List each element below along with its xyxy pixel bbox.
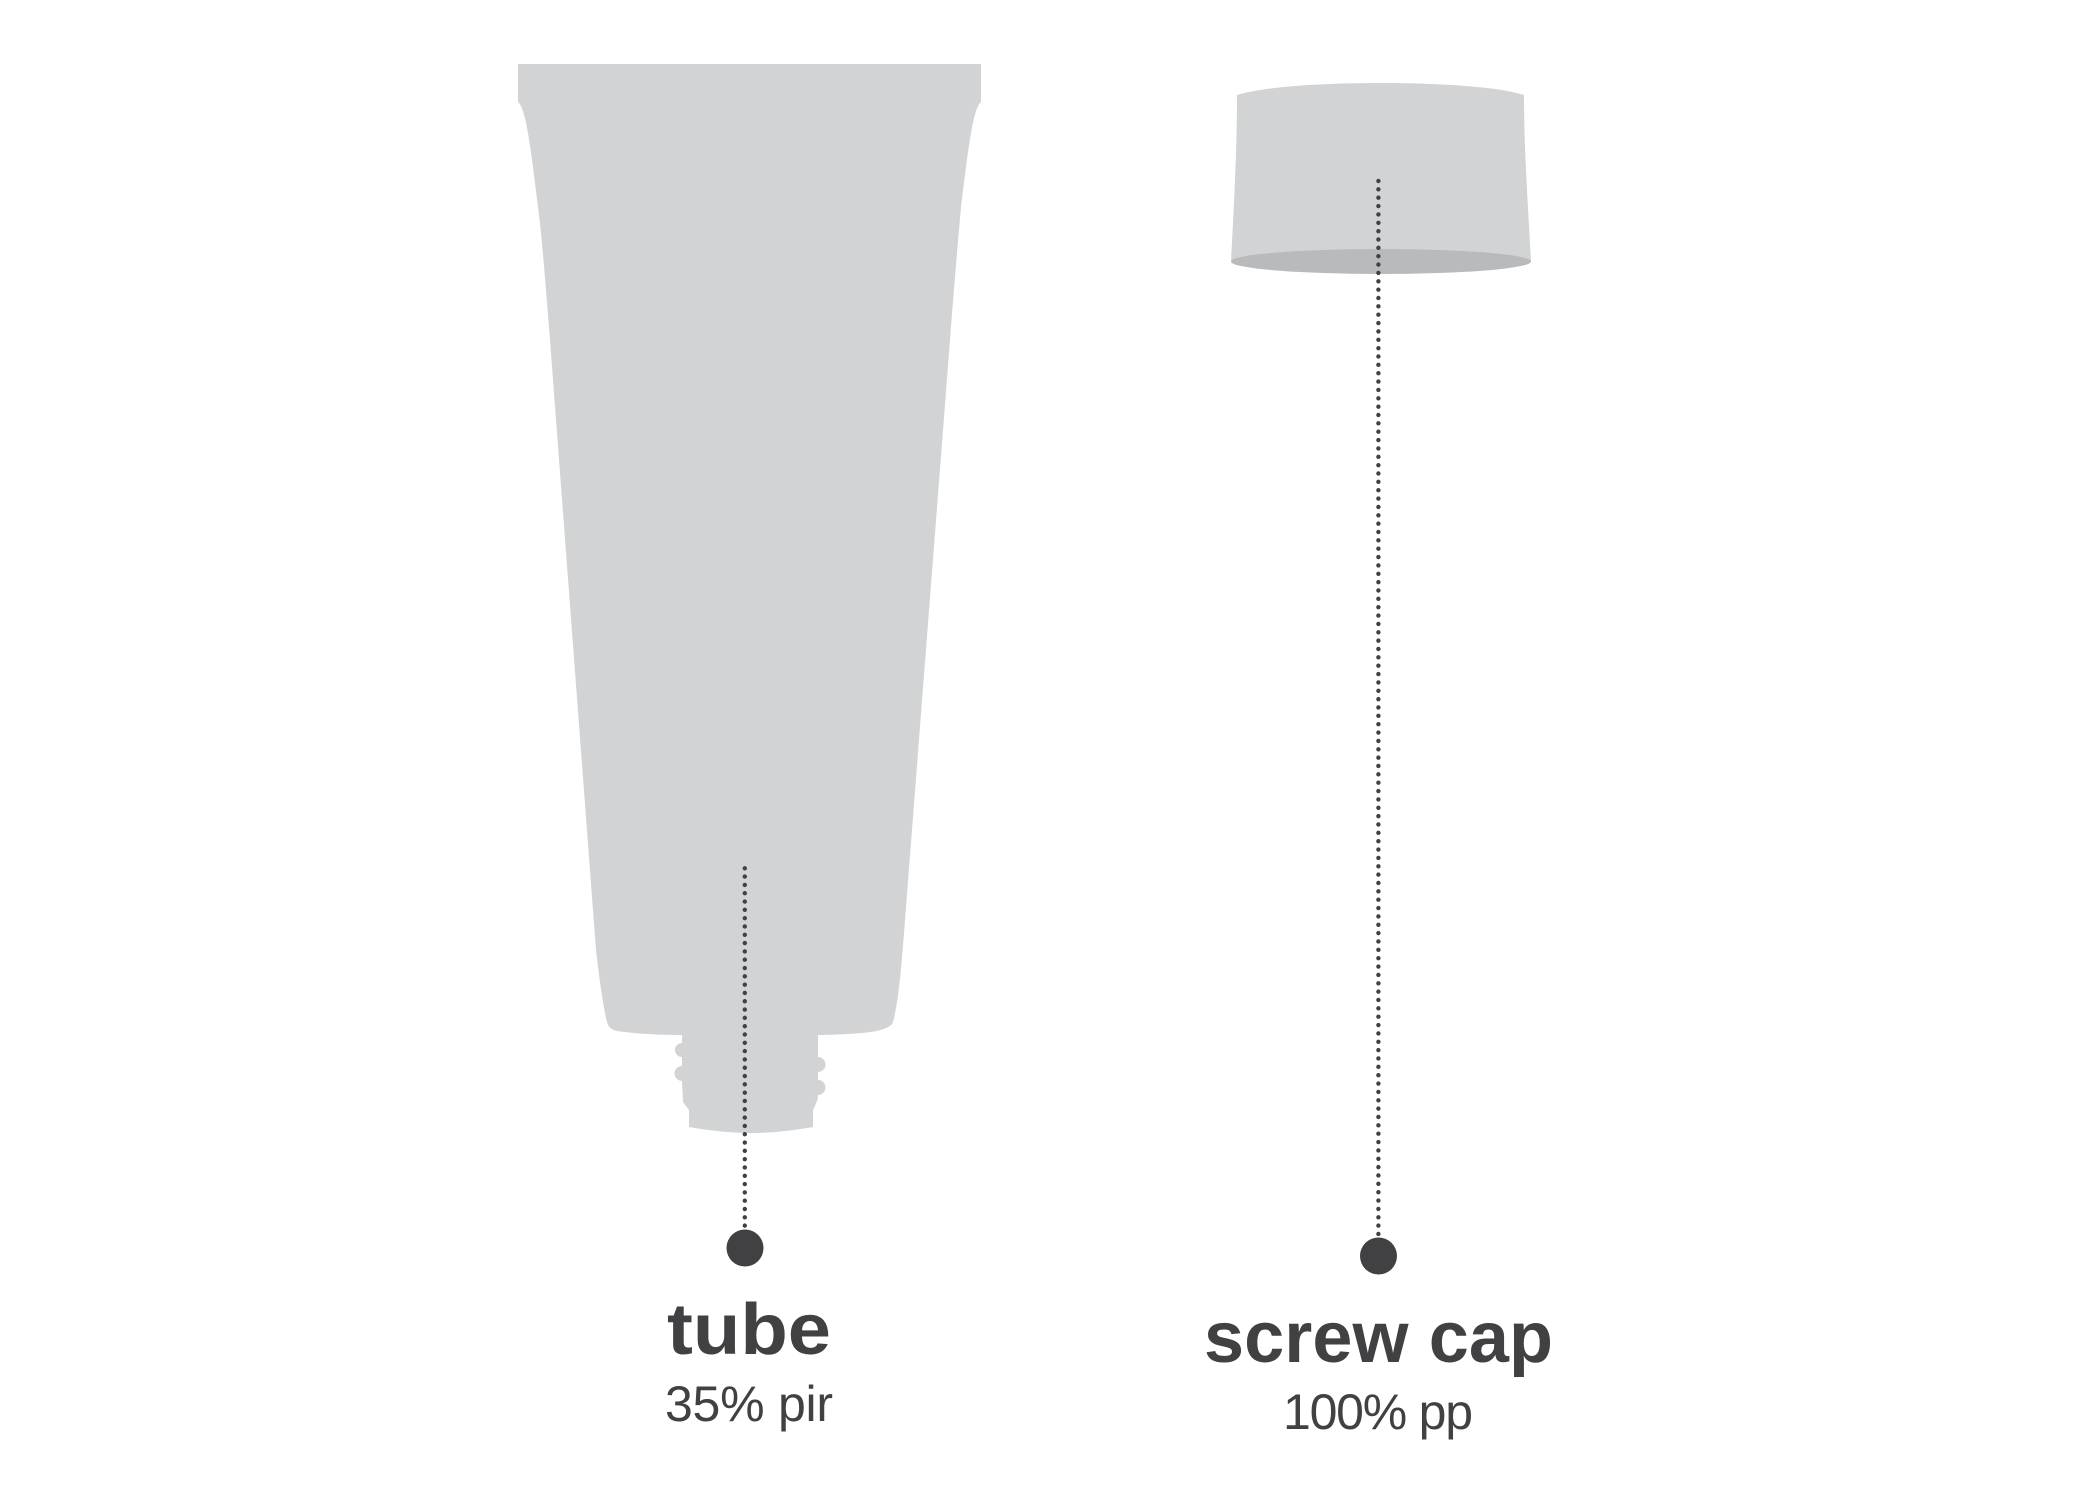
tube component <box>518 64 981 1432</box>
cap heading: screw cap <box>1204 1298 1553 1378</box>
tube marker dot <box>726 1230 764 1266</box>
cap leader line <box>1376 181 1381 1236</box>
tube material text: 35% pir <box>665 1376 833 1432</box>
screw cap component <box>1204 83 1553 1440</box>
cap body <box>1231 83 1531 261</box>
cap marker dot <box>1360 1238 1397 1274</box>
cap material text: 100% pp <box>1283 1384 1473 1440</box>
cap underside ellipse <box>1231 249 1531 274</box>
tube heading: tube <box>667 1290 831 1370</box>
tube leader line <box>743 868 747 1228</box>
tube silhouette <box>518 64 981 1133</box>
